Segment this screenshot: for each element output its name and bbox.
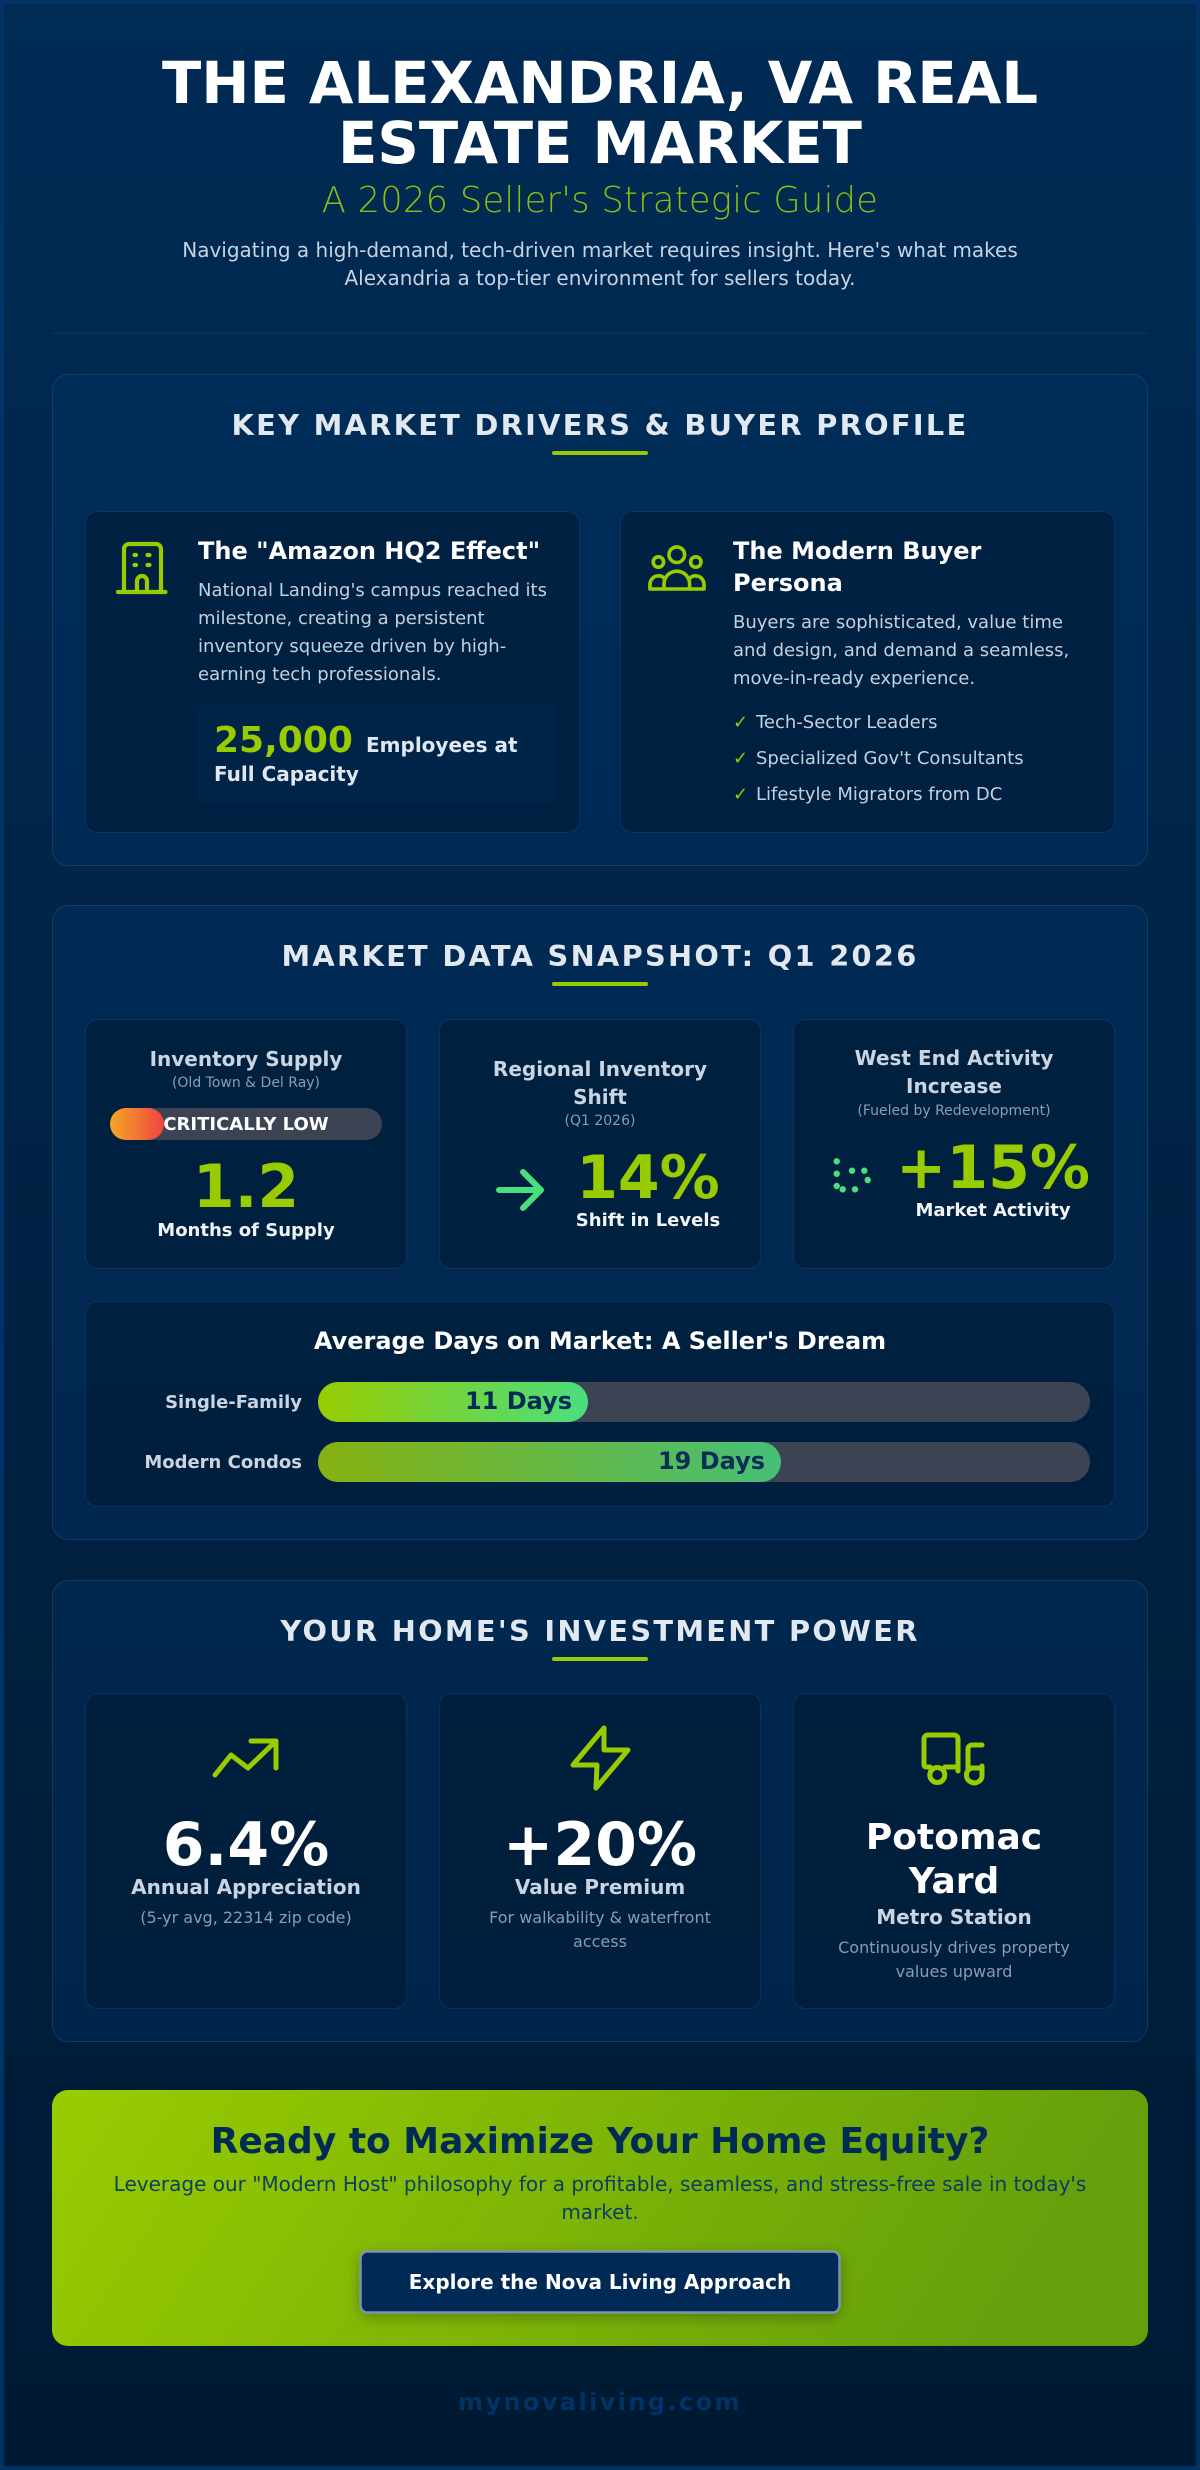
stat box: 25,000 employees: 25,000 bbox=[214, 720, 353, 761]
card body: earning tech professionals. bbox=[198, 664, 441, 685]
card body: and design, and demand a seamless, bbox=[733, 640, 1069, 661]
checklist: ✓ bbox=[733, 748, 748, 769]
card: modern buyer persona bbox=[620, 512, 1114, 832]
icon: arrow bbox=[499, 1172, 541, 1208]
card: regional inventory shift: (Q1 2026) bbox=[565, 1113, 635, 1129]
card: regional inventory shift: Shift bbox=[573, 1085, 627, 1109]
card title: The Modern Buyer bbox=[733, 537, 981, 565]
title: ESTATE MARKET bbox=[338, 110, 862, 177]
intro text: Navigating a high-demand, tech-driven market requires insight. Here's what makes bbox=[182, 238, 1018, 262]
icon: lightning bolt bbox=[573, 1728, 628, 1788]
cta heading: Ready to Maximize Your Home Equity? bbox=[211, 2121, 989, 2162]
card: amazon hq2 effect bbox=[86, 512, 580, 832]
card: value premium: Value Premium bbox=[515, 1875, 685, 1899]
panel: key market drivers and buyer profile bbox=[52, 374, 1148, 866]
heading: investment power: YOUR HOME'S INVESTMENT POWER bbox=[279, 1614, 920, 1648]
card title: Persona bbox=[733, 569, 843, 597]
card: inventory supply bbox=[86, 1020, 406, 1268]
card: value premium: +20% bbox=[503, 1810, 697, 1880]
panel: market data snapshot bbox=[52, 906, 1148, 1540]
card: potomac yard: Metro Station bbox=[876, 1905, 1032, 1929]
card: annual appreciation: (5-yr avg, 22314 zip code) bbox=[140, 1908, 352, 1927]
heading: key market drivers: KEY MARKET DRIVERS & BUYER PROFILE bbox=[231, 408, 969, 442]
checklist: Tech-Sector Leaders bbox=[755, 712, 938, 733]
panel: call to action bbox=[52, 2090, 1148, 2346]
card: regional inventory shift: Shift in Levels bbox=[576, 1210, 720, 1231]
card: potomac yard: Potomac bbox=[866, 1817, 1042, 1858]
stat: 1.2 months: 1.2 bbox=[193, 1152, 299, 1222]
icon: building bbox=[118, 544, 166, 592]
icon: dot cluster bbox=[834, 1158, 871, 1193]
card: west end activity: West End Activity bbox=[855, 1046, 1053, 1070]
gauge: critically low bbox=[110, 1108, 382, 1140]
checklist: ✓ bbox=[733, 712, 748, 733]
stat box: 25,000 employees: Employees at bbox=[366, 733, 518, 757]
card body: move-in-ready experience. bbox=[733, 668, 975, 689]
icon: truck bbox=[924, 1735, 982, 1783]
card: potomac yard: Yard bbox=[908, 1861, 999, 1902]
card: west end activity bbox=[794, 1020, 1114, 1268]
gauge: critically low: CRITICALLY LOW bbox=[163, 1114, 329, 1135]
icon: group of people bbox=[650, 547, 704, 589]
card body: milestone, creating a persistent bbox=[198, 608, 485, 629]
bar: modern condos bbox=[144, 1442, 1090, 1482]
card: value premium: For walkability & waterfront bbox=[489, 1908, 711, 1927]
card: west end activity: Market Activity bbox=[915, 1200, 1071, 1221]
stat: +15%: +15% bbox=[896, 1133, 1090, 1203]
stat box: 25,000 employees bbox=[198, 703, 555, 805]
card: annual appreciation: 6.4% bbox=[163, 1810, 329, 1880]
chart: average days on market: Average Days on Market: A Seller's Dream bbox=[314, 1327, 886, 1355]
header bbox=[162, 50, 1038, 290]
cta text: Leverage our "Modern Host" philosophy for a profitable, seamless, and stress-free sale in today's bbox=[114, 2172, 1086, 2196]
bar: modern condos: 19 Days bbox=[658, 1447, 765, 1475]
icon: trending up bbox=[215, 1741, 276, 1775]
bar: single-family: Single-Family bbox=[165, 1392, 302, 1413]
cta text: market. bbox=[561, 2200, 639, 2224]
stat box: 25,000 employees: Full Capacity bbox=[214, 762, 359, 786]
checklist bbox=[733, 712, 1024, 805]
card body: Buyers are sophisticated, value time bbox=[733, 612, 1063, 633]
card: value premium bbox=[440, 1694, 760, 2008]
card: regional inventory shift: Regional Inventory bbox=[493, 1057, 707, 1081]
card: west end activity: Increase bbox=[906, 1074, 1002, 1098]
checklist: Lifestyle Migrators from DC bbox=[756, 784, 1002, 805]
checklist: Specialized Gov't Consultants bbox=[756, 748, 1024, 769]
stat: 14%: 14% bbox=[576, 1143, 720, 1213]
bar: modern condos: Modern Condos bbox=[144, 1452, 302, 1473]
panel: your home's investment power bbox=[52, 1580, 1148, 2042]
intro text: Alexandria a top-tier environment for sellers today. bbox=[344, 266, 856, 290]
button: Explore the Nova Living Approach bbox=[409, 2270, 791, 2294]
card: west end activity: (Fueled by Redevelopment) bbox=[857, 1103, 1051, 1119]
checklist: ✓ bbox=[733, 784, 748, 805]
card: regional inventory shift bbox=[440, 1020, 760, 1268]
card: potomac yard: values upward bbox=[896, 1962, 1012, 1981]
subtitle: A 2026 Seller's Strategic Guide bbox=[322, 180, 878, 221]
card: annual appreciation bbox=[86, 1694, 406, 2008]
card body: inventory squeeze driven by high- bbox=[198, 636, 506, 657]
bar: single-family: 11 Days bbox=[465, 1387, 572, 1415]
button bbox=[360, 2252, 840, 2312]
footer url: mynovaliving.com bbox=[458, 2388, 742, 2416]
title: THE ALEXANDRIA, VA REAL bbox=[162, 50, 1038, 117]
card: potomac yard: Continuously drives property bbox=[838, 1938, 1070, 1957]
card body: National Landing's campus reached its bbox=[198, 580, 547, 601]
card title: The "Amazon HQ2 Effect" bbox=[198, 537, 540, 565]
card: inventory supply: Inventory Supply bbox=[150, 1047, 342, 1071]
bar: single-family bbox=[165, 1382, 1090, 1422]
card: value premium: access bbox=[573, 1932, 627, 1951]
card: annual appreciation: Annual Appreciation bbox=[131, 1875, 361, 1899]
card: potomac yard bbox=[794, 1694, 1114, 2008]
heading: market data snapshot: MARKET DATA SNAPSHOT: Q1 2026 bbox=[281, 939, 919, 973]
chart: average days on market bbox=[86, 1302, 1114, 1506]
card: inventory supply: (Old Town & Del Ray) bbox=[172, 1075, 320, 1091]
card: inventory supply: Months of Supply bbox=[157, 1220, 335, 1241]
